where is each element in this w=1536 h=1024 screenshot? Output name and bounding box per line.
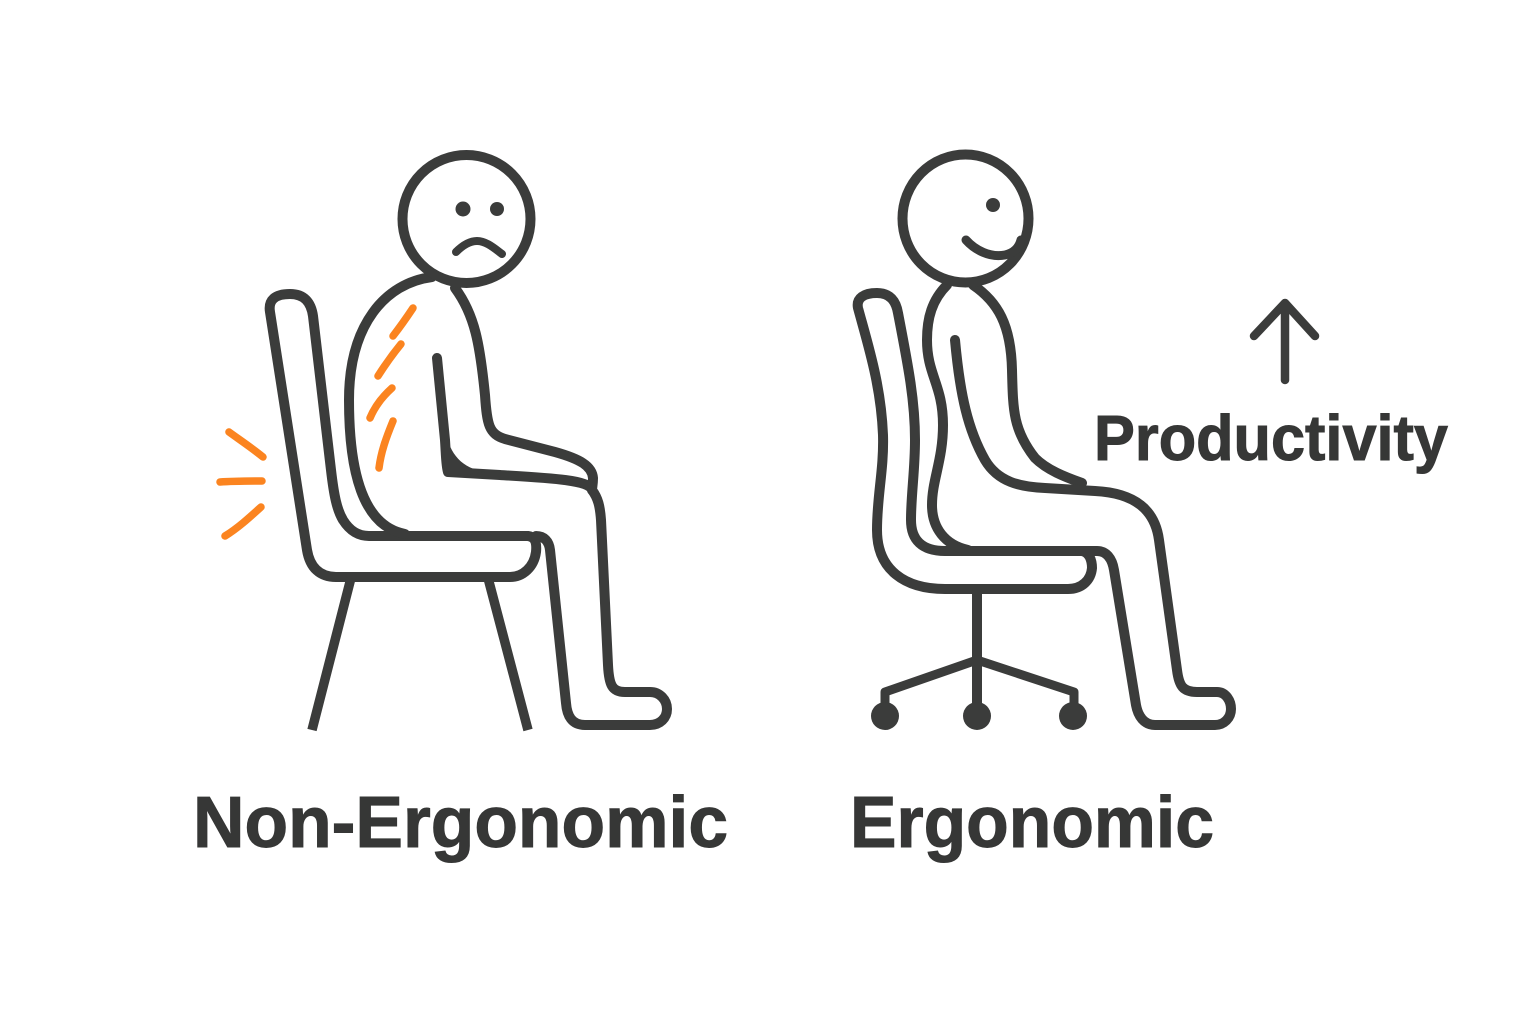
pain marks: spine [370,308,413,468]
panel: ergonomic figure [858,154,1231,730]
chair: swivel office chair [858,293,1092,730]
person: slouched body [349,277,667,725]
heading: ergonomic label: Ergonomic [850,783,1214,863]
heading: non-ergonomic label: Non-Ergonomic [193,783,728,863]
head: smiling face [902,154,1028,282]
head: sad face [402,155,530,283]
panel: non-ergonomic figure [220,155,667,730]
chair: plain four-leg chair [270,294,536,730]
pain marks: lower back burst [220,432,263,536]
text: productivity label: Productivity [1094,402,1448,474]
person: upright body [927,285,1231,725]
icon: productivity up arrow [1254,303,1315,380]
